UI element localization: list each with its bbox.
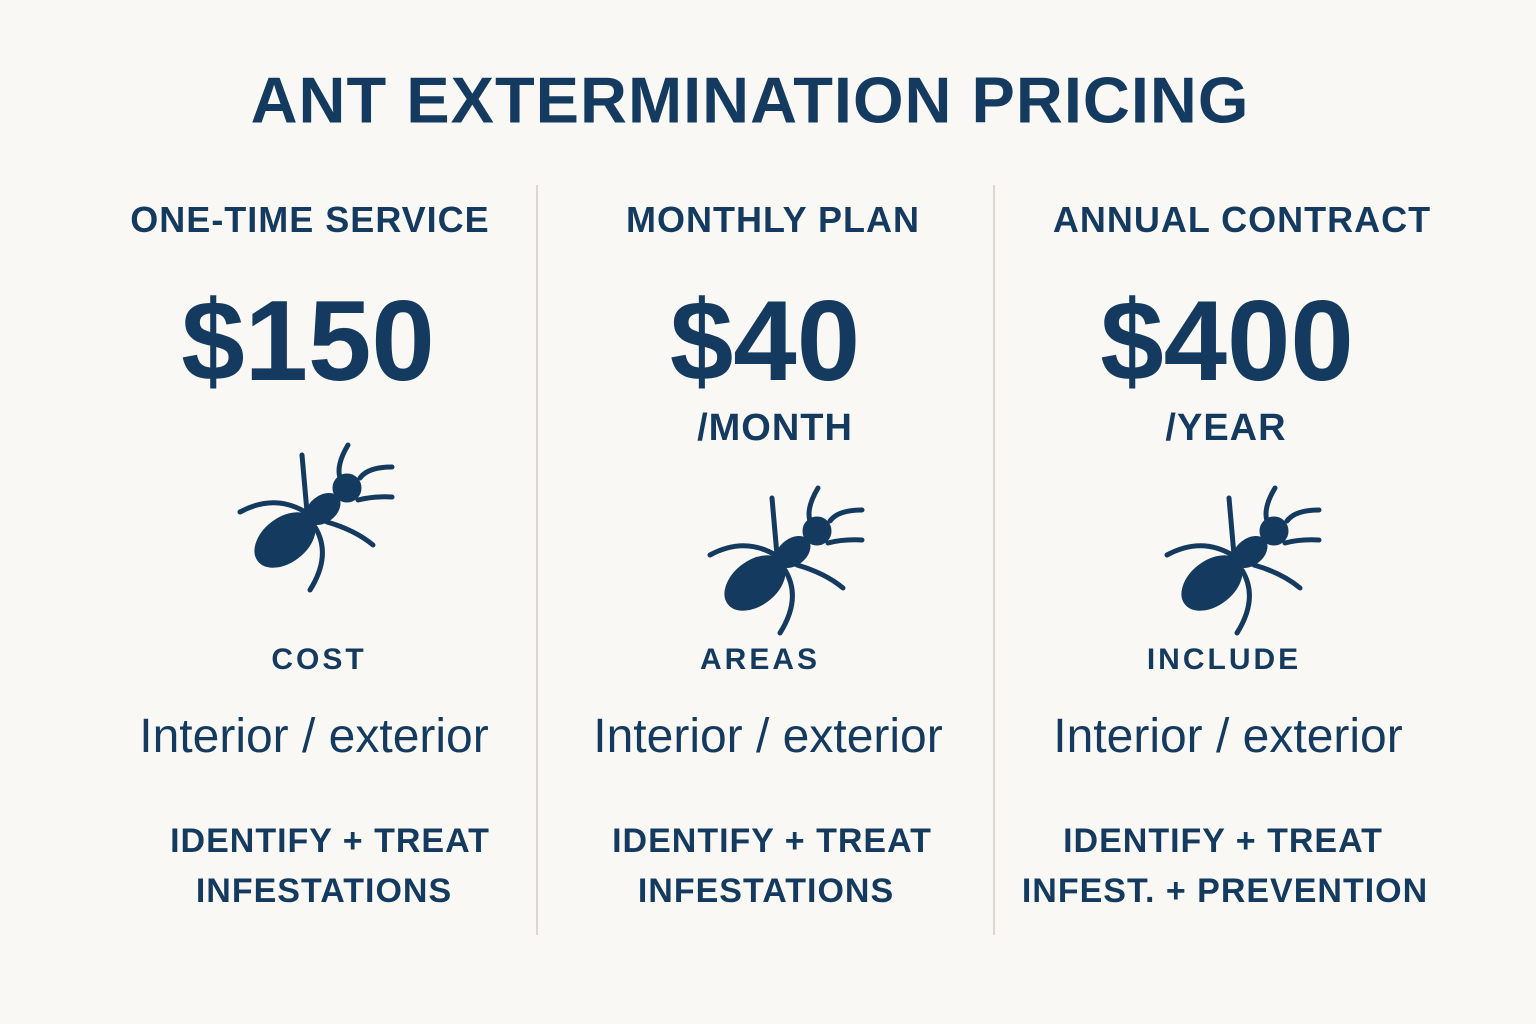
label: INCLUDE <box>1147 643 1301 676</box>
text: areas: Interior / exterior <box>593 710 943 763</box>
panel: annual contract: INFEST. + PREVENTION <box>1022 872 1428 910</box>
label: COST <box>271 643 367 676</box>
period: /YEAR <box>1165 407 1287 449</box>
icon: ant <box>1164 486 1322 636</box>
text: service: IDENTIFY + TREAT <box>1063 822 1383 860</box>
panel: annual contract <box>1022 199 1431 910</box>
price: $150 <box>181 278 435 405</box>
label: AREAS <box>700 643 820 676</box>
heading: ONE-TIME SERVICE <box>130 199 490 240</box>
panel: monthly plan: INFESTATIONS <box>638 872 894 910</box>
text: service: IDENTIFY + TREAT <box>612 822 932 860</box>
panel: monthly plan <box>593 199 943 910</box>
text: areas: Interior / exterior <box>139 710 489 763</box>
period: /MONTH <box>697 407 853 449</box>
text: service: IDENTIFY + TREAT <box>170 822 490 860</box>
price: $400 <box>1100 278 1354 405</box>
heading: ANNUAL CONTRACT <box>1053 199 1431 240</box>
icon: ant <box>708 486 864 636</box>
panel: one-time service: INFESTATIONS <box>196 872 452 910</box>
price: $40 <box>670 278 860 405</box>
text: areas: Interior / exterior <box>1053 710 1403 763</box>
heading: MONTHLY PLAN <box>626 199 920 240</box>
title: ANT EXTERMINATION PRICING <box>251 64 1249 136</box>
panel: one-time service <box>130 199 490 910</box>
icon: ant <box>238 442 394 592</box>
